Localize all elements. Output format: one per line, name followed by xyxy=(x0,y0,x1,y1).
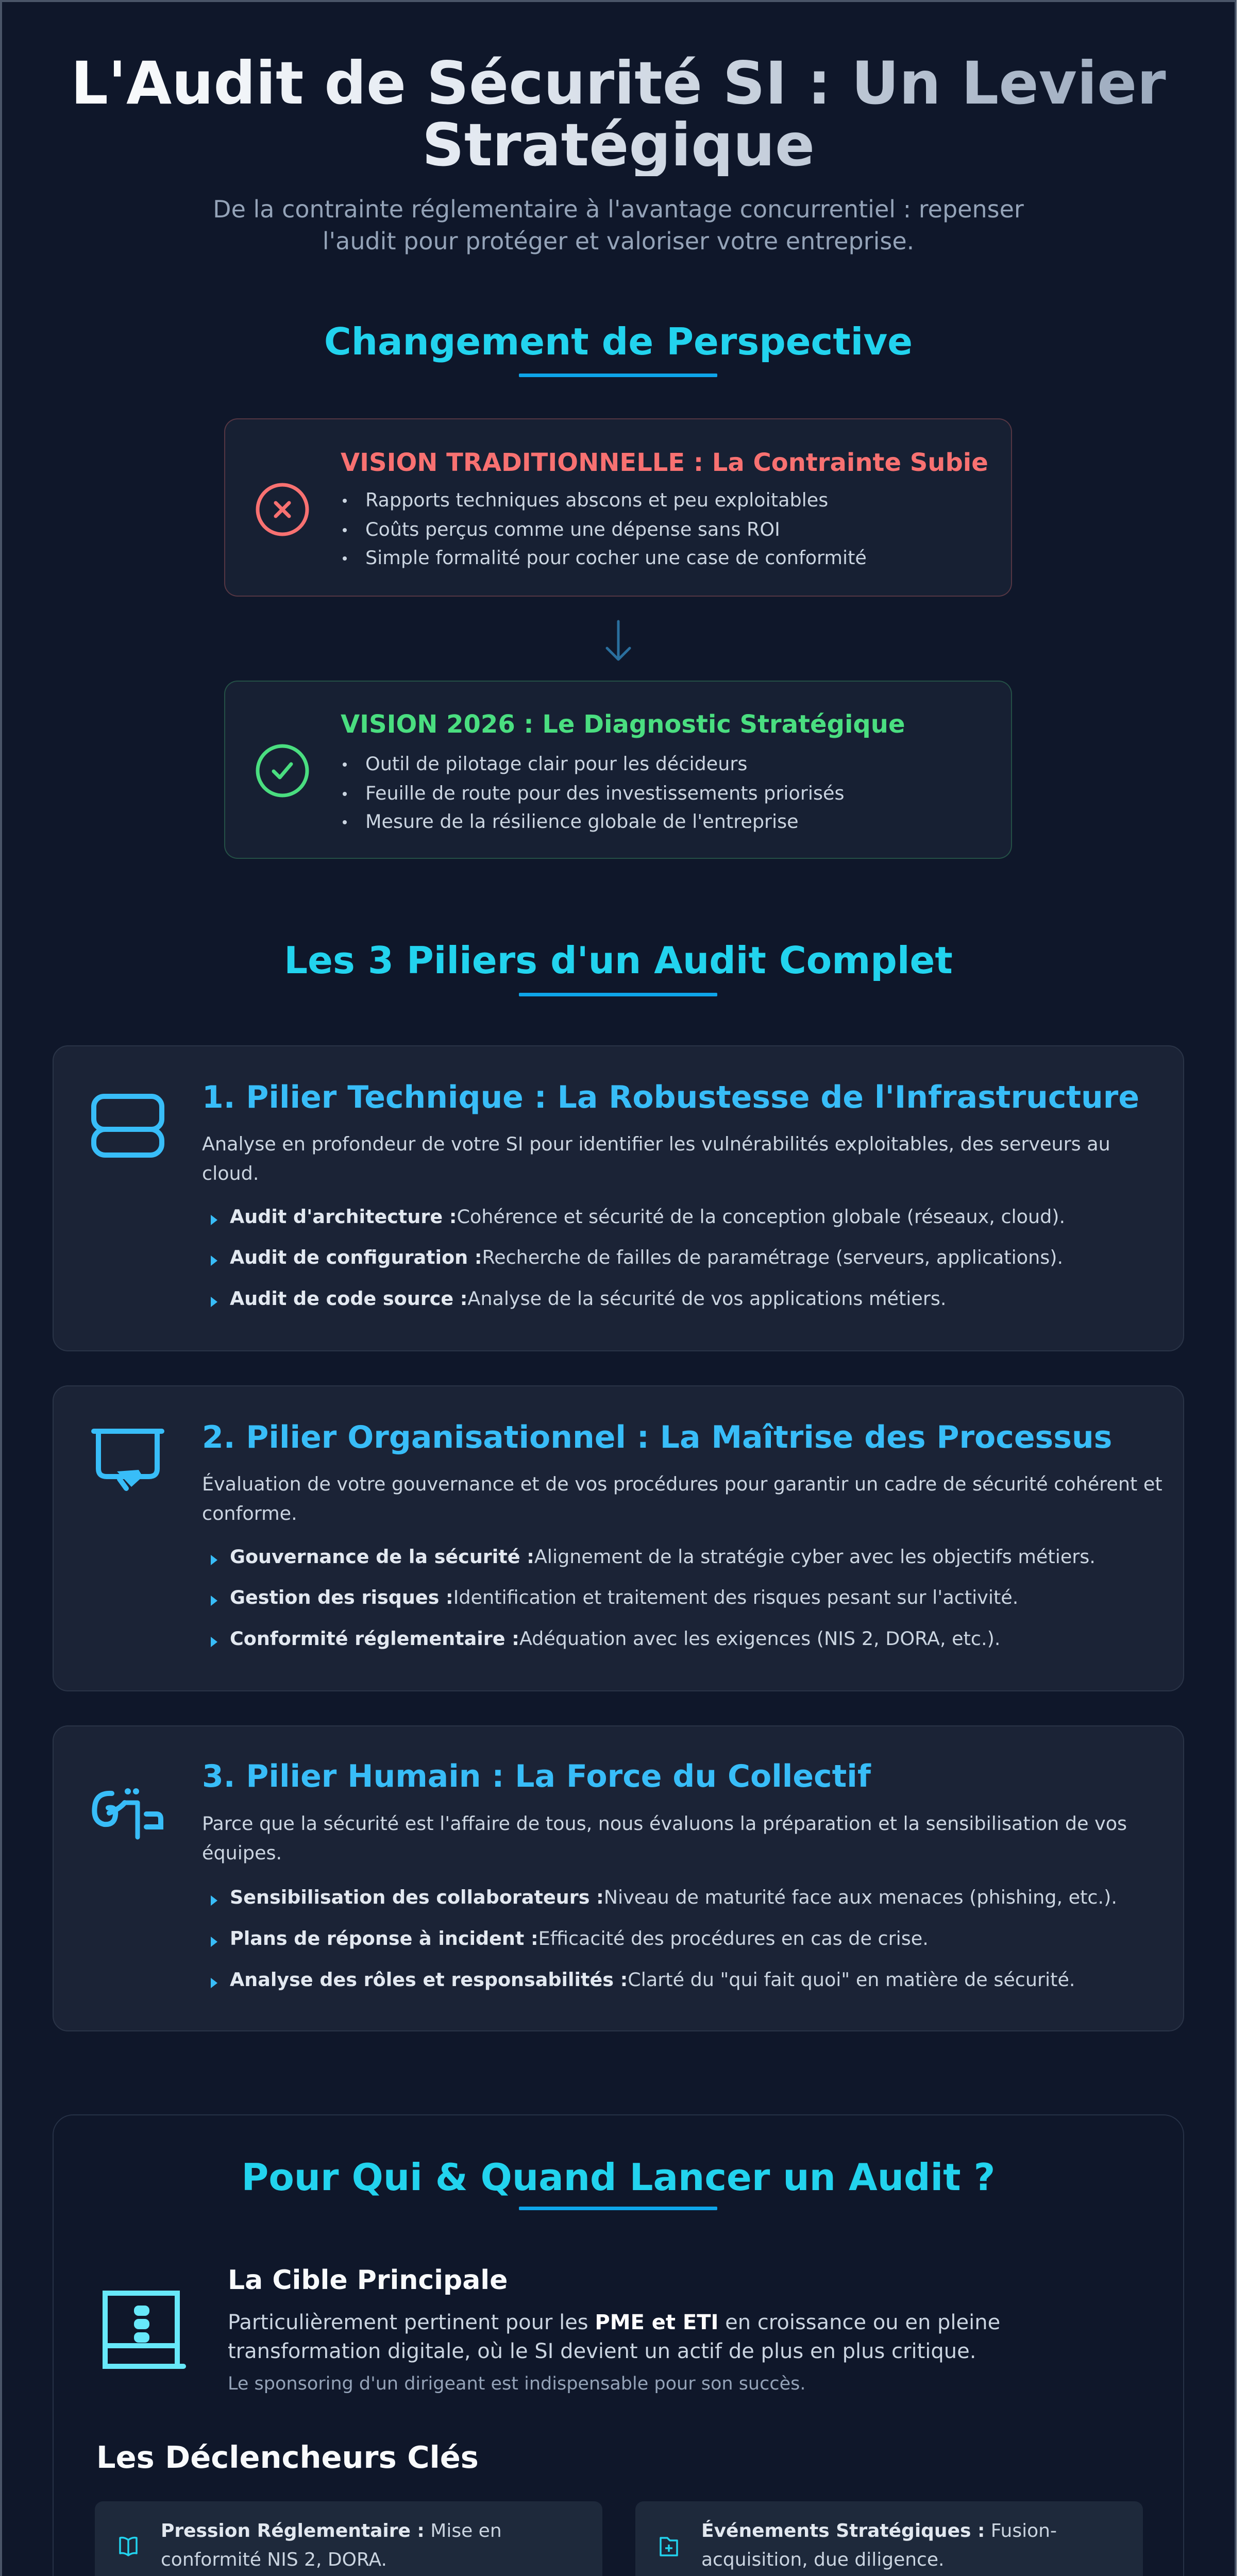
subtitle: l'audit pour protéger et valoriser votre entreprise. xyxy=(323,227,914,255)
panel: pour qui et quand xyxy=(53,2114,1184,2576)
panel: pilier humain xyxy=(53,1725,1184,2031)
panel: vision 2026 xyxy=(224,681,1012,859)
description: Analyse en profondeur de votre SI pour identifier les vulnérabilités exploitables, des serveurs au xyxy=(202,1133,1110,1155)
icon: folder plus xyxy=(660,2537,678,2556)
bullet list: Gouvernance de la sécurité :Alignement de la stratégie cyber avec les objectifs métiers. xyxy=(230,1546,1096,1568)
bullet list: Audit de configuration :Recherche de failles de paramétrage (serveurs, applications). xyxy=(230,1246,1063,1268)
heading: vision 2026: VISION 2026 : Le Diagnostic Stratégique xyxy=(341,710,905,739)
text: cible principale: Particulièrement pertinent pour les PME et ETI en croissance ou en pleine xyxy=(228,2311,1000,2334)
bullet list: Conformité réglementaire :Adéquation avec les exigences (NIS 2, DORA, etc.). xyxy=(230,1628,1000,1650)
text: cible principale: transformation digitale, où le SI devient un actif de plus en plus critique. xyxy=(228,2340,976,2363)
description xyxy=(202,1133,1110,1184)
title xyxy=(2,53,1235,176)
bullet list xyxy=(343,753,844,833)
description: conforme. xyxy=(202,1502,297,1524)
bullet list: Rapports techniques abscons et peu exploitables xyxy=(365,489,828,511)
description: équipes. xyxy=(202,1842,282,1864)
heading: 3. Pilier Humain : La Force du Collectif xyxy=(202,1758,871,1794)
panel: vision traditionnelle xyxy=(224,418,1012,597)
icon: organisation xyxy=(91,1429,164,1491)
subtitle xyxy=(213,195,1024,255)
title: Stratégique xyxy=(422,111,815,179)
heading: 2. Pilier Organisationnel : La Maîtrise des Processus xyxy=(202,1419,1112,1455)
bullet list: Analyse des rôles et responsabilités :Clarté du "qui fait quoi" en matière de sécurité. xyxy=(230,1969,1075,1991)
trigger: evenements strategiques: Événements Stratégiques : Fusion- xyxy=(701,2520,1057,2541)
description: Parce que la sécurité est l'affaire de tous, nous évaluons la préparation et la sensibilisation de vos xyxy=(202,1812,1127,1835)
bullet list: Gestion des risques :Identification et traitement des risques pesant sur l'activité. xyxy=(230,1586,1018,1608)
bullet list: Coûts perçus comme une dépense sans ROI xyxy=(365,518,780,540)
bullet list: Simple formalité pour cocher une case de conformité xyxy=(365,547,867,569)
subtitle: De la contrainte réglementaire à l'avantage concurrentiel : repenser xyxy=(213,195,1024,223)
heading: changement de perspective: Changement de Perspective xyxy=(324,320,913,363)
bullet list xyxy=(211,1886,1117,1991)
bullet list xyxy=(343,489,867,569)
bullet list: Audit de code source :Analyse de la sécurité de vos applications métiers. xyxy=(230,1287,946,1310)
bullet list xyxy=(211,1546,1096,1650)
trigger: pression reglementaire xyxy=(95,2501,602,2576)
heading: vision traditionnelle: VISION TRADITIONNELLE : La Contrainte Subie xyxy=(341,448,988,477)
heading: 3 piliers: Les 3 Piliers d'un Audit Complet xyxy=(284,939,953,982)
heading: Pour Qui & Quand Lancer un Audit ? xyxy=(242,2156,995,2199)
trigger: pression reglementaire: Pression Réglementaire : Mise en xyxy=(161,2520,502,2541)
icon: green check circle xyxy=(256,744,309,798)
description: cloud. xyxy=(202,1162,259,1184)
description: Évaluation de votre gouvernance et de vos procédures pour garantir un cadre de sécurité cohérent et xyxy=(202,1473,1162,1495)
icon: book xyxy=(119,2537,138,2556)
description xyxy=(202,1812,1127,1864)
text: cible principale: Le sponsoring d'un dirigeant est indispensable pour son succès. xyxy=(228,2374,806,2394)
bullet list: Audit d'architecture :Cohérence et sécurité de la conception globale (réseaux, cloud). xyxy=(230,1206,1065,1228)
trigger: evenements strategiques: acquisition, due diligence. xyxy=(701,2549,944,2570)
title: L'Audit de Sécurité SI : Un Levier xyxy=(71,49,1166,117)
trigger: evenements strategiques xyxy=(635,2501,1143,2576)
icon: server xyxy=(91,1094,164,1158)
panel: pilier organisationnel xyxy=(53,1385,1184,1691)
description xyxy=(202,1473,1162,1524)
heading: 1. Pilier Technique : La Robustesse de l'Infrastructure xyxy=(202,1079,1139,1115)
icon: people xyxy=(92,1788,163,1839)
text: cible principale: La Cible Principale xyxy=(228,2265,508,2296)
trigger: pression reglementaire: conformité NIS 2, DORA. xyxy=(161,2549,387,2570)
bullet list: Feuille de route pour des investissements priorisés xyxy=(365,782,844,804)
bullet list xyxy=(211,1206,1065,1310)
icon: red cross circle xyxy=(256,483,309,536)
text: cible principale xyxy=(228,2265,1000,2394)
bullet list: Plans de réponse à incident :Efficacité des procédures en cas de crise. xyxy=(230,1927,929,1950)
arrow: down xyxy=(606,620,631,660)
bullet list: Mesure de la résilience globale de l'entreprise xyxy=(365,810,799,833)
bullet list: Sensibilisation des collaborateurs :Niveau de maturité face aux menaces (phishing, etc.). xyxy=(230,1886,1117,1908)
bullet list: Outil de pilotage clair pour les décideurs xyxy=(365,753,747,775)
icon: building xyxy=(103,2291,186,2369)
panel: pilier technique xyxy=(53,1045,1184,1351)
heading: declencheurs: Les Déclencheurs Clés xyxy=(96,2439,479,2475)
